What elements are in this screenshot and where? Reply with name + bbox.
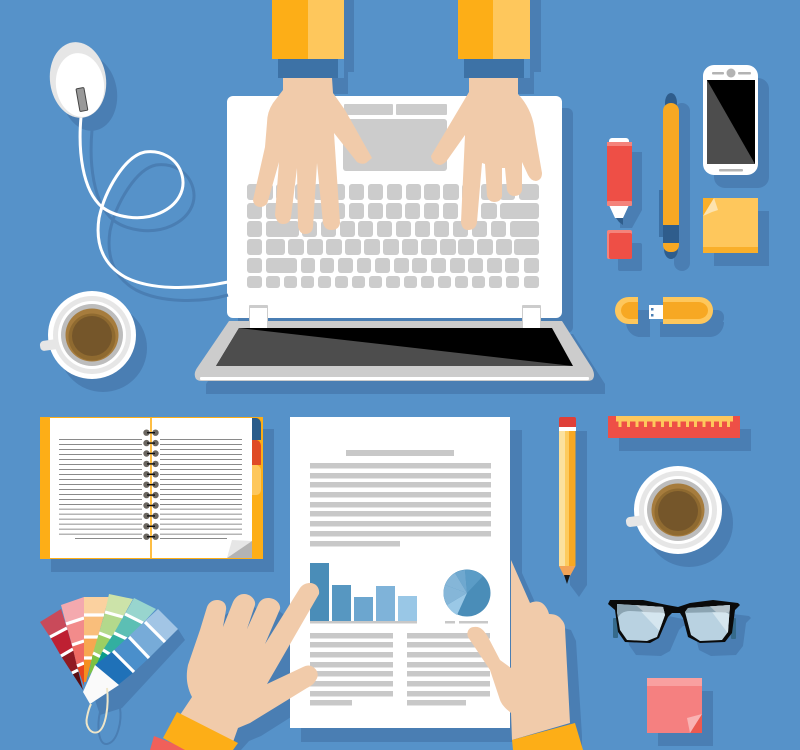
cup shadow — [59, 304, 147, 392]
mouse and cable shadow — [56, 51, 228, 300]
temple arms — [613, 618, 736, 639]
laptop — [195, 96, 605, 394]
notebook shadow — [51, 429, 274, 572]
pie legend — [445, 621, 488, 624]
notebook — [40, 417, 274, 572]
right typing arm — [431, 0, 542, 230]
pen body — [659, 93, 679, 259]
phone body — [703, 65, 758, 175]
left typing hand — [253, 78, 372, 234]
right typing hand — [431, 78, 542, 230]
left text column — [310, 633, 393, 706]
marker cap — [607, 230, 632, 259]
pencil tip — [559, 566, 576, 584]
saucer — [39, 291, 136, 379]
note shadow — [658, 691, 713, 746]
sleeve shadow — [332, 0, 354, 94]
laptop screen lid — [195, 321, 594, 381]
notebook cover — [40, 417, 263, 559]
cable — [80, 117, 228, 287]
glasses shadow — [619, 613, 751, 656]
notebook tabs — [252, 418, 261, 495]
glasses frame — [608, 600, 740, 643]
notebook pages — [50, 418, 252, 558]
laptop base — [227, 96, 562, 318]
USB stick — [615, 297, 724, 337]
ruler body — [608, 416, 740, 438]
swatch: blue blade — [95, 609, 178, 685]
USB body — [663, 297, 713, 324]
ruler scale — [616, 416, 733, 427]
orange sleeve — [163, 712, 238, 750]
swatch: red blade — [40, 609, 83, 690]
note — [703, 198, 758, 253]
pencil shaft — [559, 431, 576, 566]
smartphone — [703, 65, 769, 188]
ruled lines right page — [160, 439, 242, 539]
pie chart — [444, 570, 490, 616]
note fold — [687, 714, 702, 733]
sleeve — [458, 0, 530, 78]
USB shadow — [626, 310, 724, 337]
swatch tag — [83, 665, 119, 704]
coffee cup right — [625, 466, 733, 567]
pencil — [559, 417, 576, 584]
document — [290, 417, 510, 728]
highlighter marker — [607, 138, 642, 271]
coffee — [652, 484, 704, 536]
USB connector — [649, 305, 663, 319]
USB cap — [615, 297, 638, 324]
right lens — [685, 605, 730, 641]
sleeve — [272, 0, 344, 78]
swatch: green blade — [88, 594, 133, 678]
swatch: orange blade — [84, 597, 109, 682]
holding hand — [467, 560, 570, 740]
note bottom strip — [703, 247, 758, 253]
sleeve shadow — [518, 0, 541, 94]
yellow sticky note — [703, 198, 769, 266]
left lens — [617, 604, 665, 641]
glasses — [608, 600, 751, 656]
note top strip — [647, 678, 702, 686]
mouse body — [45, 38, 111, 122]
saucer — [625, 466, 722, 554]
document body text — [310, 463, 491, 546]
document title — [346, 450, 454, 456]
right text column — [407, 633, 490, 706]
keyboard — [247, 184, 539, 288]
hinges — [249, 305, 541, 328]
trackpad and top buttons — [343, 104, 447, 171]
pen shadow — [674, 103, 690, 271]
pink sticky note — [647, 678, 713, 746]
coral sleeve lining — [150, 736, 190, 750]
lower left arm — [150, 583, 319, 750]
paper — [290, 417, 510, 728]
orange sleeve — [512, 723, 583, 750]
phone screen — [707, 80, 755, 164]
swatch: teal blade — [95, 598, 156, 668]
eraser — [559, 417, 576, 431]
coffee — [66, 308, 118, 362]
phone speaker and home bar — [712, 68, 751, 172]
marker shadow — [618, 150, 642, 271]
ruler shadow — [619, 429, 751, 451]
document shadows and left hand shadow — [194, 430, 587, 750]
page corner curl — [227, 540, 252, 558]
spiral binding — [143, 430, 159, 540]
ruler — [608, 416, 751, 451]
ruled lines left page — [59, 439, 142, 539]
mouse with cable — [45, 38, 228, 300]
coffee cup left — [39, 291, 147, 392]
bar chart — [310, 563, 417, 624]
notebook spine — [150, 418, 152, 558]
pointing hand — [180, 583, 319, 745]
swatch shadow — [95, 629, 185, 744]
marker body — [607, 138, 632, 225]
note shadow — [714, 211, 769, 266]
laptop shadow — [206, 108, 605, 394]
swatch: pink blade — [61, 597, 84, 686]
note — [647, 678, 702, 733]
pen — [659, 93, 690, 271]
cup shadow — [645, 479, 733, 567]
left typing arm — [253, 0, 372, 234]
lower right arm — [467, 560, 583, 750]
phone shadow — [714, 78, 769, 188]
swatch cord — [87, 688, 108, 733]
colour swatch fan — [40, 594, 185, 744]
note fold — [703, 198, 718, 216]
